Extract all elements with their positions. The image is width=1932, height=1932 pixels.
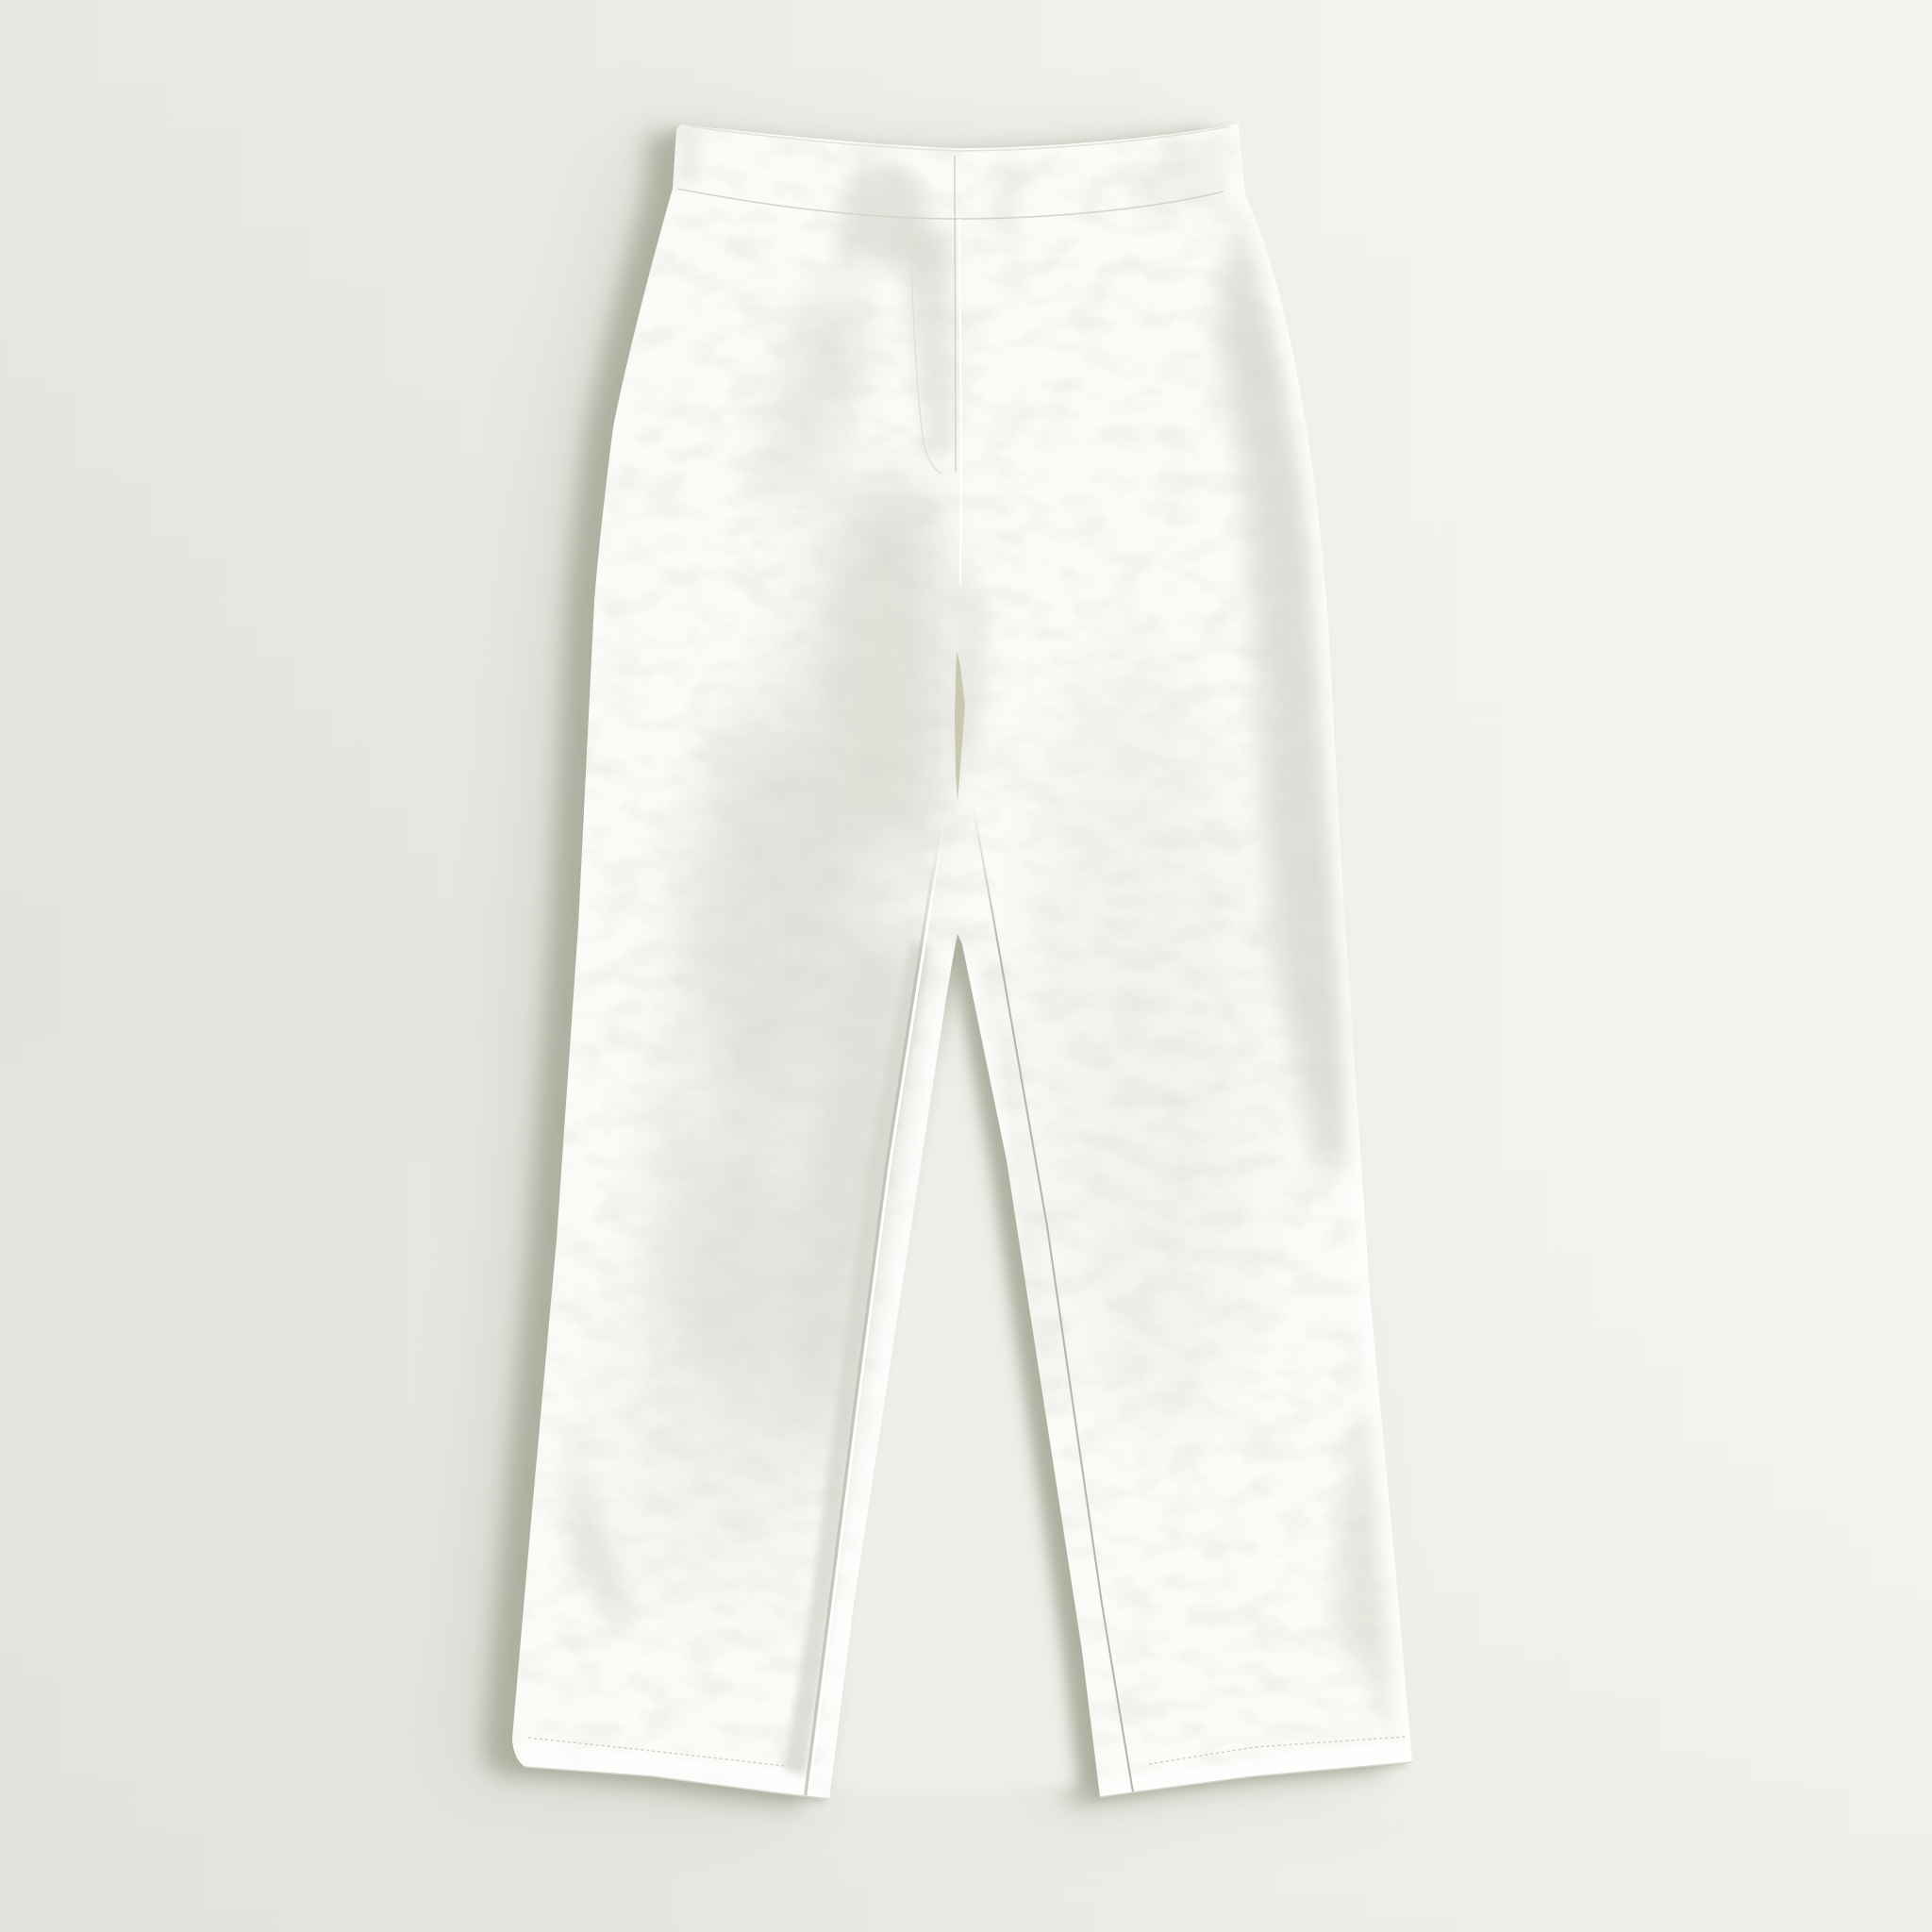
fly placket line — [910, 156, 961, 585]
cast shadow of trousers — [460, 127, 1406, 1810]
right leg outer shadow fold — [563, 208, 1400, 1717]
left hem stitching — [528, 1738, 785, 1766]
hem bottom edge shading — [525, 1762, 1412, 1799]
fabric shading and folds — [509, 123, 1415, 1802]
mottled wrinkle texture — [509, 123, 1415, 1802]
waistband top edge seam — [689, 126, 1230, 151]
left leg inseam piping — [806, 802, 948, 1795]
crisp fold patches — [691, 284, 947, 1430]
crotch slit — [955, 651, 965, 802]
broad leg shading — [637, 491, 1221, 1557]
trousers garment — [509, 123, 1415, 1802]
right leg inner shading — [960, 585, 985, 763]
waistband seam — [677, 189, 1224, 219]
waistband shading — [679, 127, 1226, 453]
garment base fabric — [512, 124, 1412, 1799]
outer edge highlights — [829, 170, 1415, 1799]
right leg inseam stitch line — [972, 799, 1133, 1792]
light gap between the legs — [840, 962, 1077, 1788]
hem highlight band — [528, 1743, 1399, 1794]
right hem stitching — [1149, 1737, 1406, 1764]
inseam gray bands — [794, 943, 920, 1774]
